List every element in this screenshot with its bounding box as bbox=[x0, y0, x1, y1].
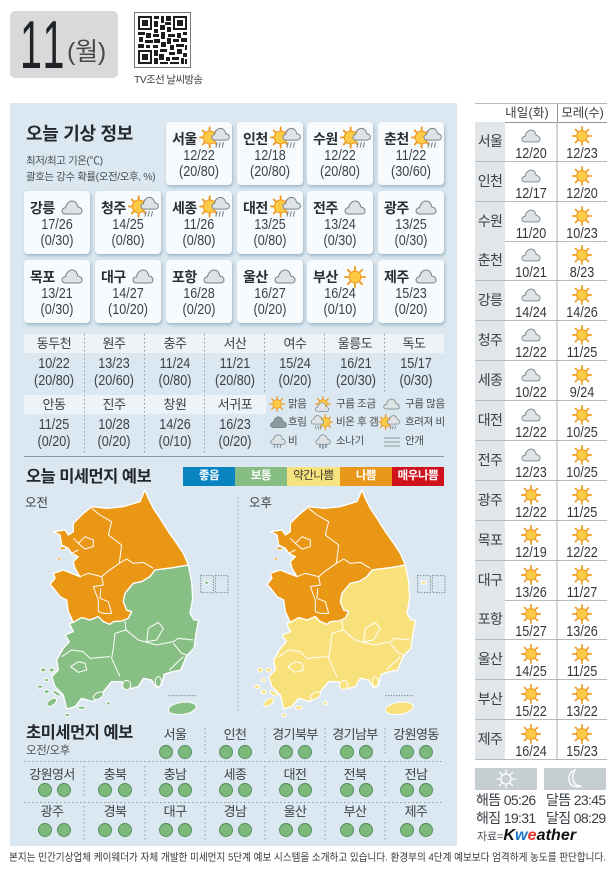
forecast row: 대구: 대구 bbox=[478, 572, 502, 588]
forecast row: 울산: 울산 bbox=[478, 651, 502, 667]
ultrafine dust grid: 경북 bbox=[104, 804, 126, 819]
card: 세종: (0/80) bbox=[183, 233, 215, 249]
card: 대구 bbox=[95, 260, 161, 323]
forecast row: 청주: 11/25 bbox=[567, 344, 597, 361]
card: 광주: (0/30) bbox=[395, 233, 427, 249]
forecast row: 전주: 전주 bbox=[478, 452, 502, 468]
table: other cities: (0/30) bbox=[400, 373, 432, 389]
card: 수원: 12/22 bbox=[324, 148, 356, 164]
card: 인천: 인천 bbox=[243, 131, 268, 147]
forecast row: 인천: 12/17 bbox=[515, 185, 547, 202]
table: other cities: 서귀포 bbox=[218, 397, 252, 412]
ultrafine dust grid: 전남 bbox=[405, 767, 427, 782]
card: 울산: 16/27 bbox=[254, 286, 286, 302]
dust level legend bbox=[183, 467, 444, 486]
forecast row: 제주: 제주 bbox=[478, 731, 502, 747]
table: other cities: (20/30) bbox=[336, 373, 376, 389]
forecast row: 포항: 13/26 bbox=[566, 623, 598, 640]
weather legend bbox=[269, 396, 445, 449]
label: morning: 오전 bbox=[25, 496, 48, 510]
dust level legend: 매우나쁨 bbox=[398, 470, 438, 482]
table: other cities: 16/23 bbox=[219, 417, 251, 433]
card: 목포: 목포 bbox=[30, 269, 55, 285]
ultrafine dust grid bbox=[24, 727, 442, 840]
table: other cities bbox=[24, 334, 444, 450]
forecast row: 목포 bbox=[475, 521, 607, 561]
moonrise and moonset times bbox=[546, 792, 606, 826]
forecast row: 울산: 11/25 bbox=[567, 663, 597, 680]
card: 세종 bbox=[166, 191, 232, 254]
table: other cities: 서산 bbox=[223, 336, 247, 351]
forecast row: 서울: 12/20 bbox=[515, 145, 547, 162]
sunrise and sunset times bbox=[476, 792, 536, 826]
forecast row: 춘천: 춘천 bbox=[478, 252, 502, 268]
dust level legend: 보통 bbox=[251, 470, 271, 482]
note text: 괄호는 강수 확률(오전/오후, %) bbox=[26, 171, 155, 183]
table: other cities: (20/60) bbox=[94, 373, 134, 389]
table: other cities: (0/20) bbox=[279, 373, 311, 389]
forecast row: 울산: 14/25 bbox=[515, 663, 547, 680]
forecast row: 강릉 bbox=[475, 281, 607, 321]
card: 대전 bbox=[237, 191, 303, 254]
forecast row: 부산: 부산 bbox=[478, 691, 502, 707]
card: 전주: 전주 bbox=[313, 200, 338, 216]
table: other cities: (0/20) bbox=[219, 434, 251, 450]
forecast table header: 모레(수) bbox=[561, 106, 604, 120]
heading: ultrafine dust: 초미세먼지 예보 bbox=[26, 724, 133, 742]
card: 목포: 13/21 bbox=[41, 286, 73, 302]
forecast row: 포항: 15/27 bbox=[515, 623, 547, 640]
table: other cities: 15/17 bbox=[400, 356, 432, 372]
forecast row: 대구: 13/26 bbox=[515, 584, 547, 601]
ultrafine dust grid: 전북 bbox=[344, 767, 366, 782]
weather legend: 맑음 bbox=[288, 398, 307, 410]
card: 전주: (0/30) bbox=[324, 233, 356, 249]
heading: fine dust: 오늘 미세먼지 예보 bbox=[26, 468, 151, 486]
table: other cities: 16/21 bbox=[340, 356, 372, 372]
card: 울산 bbox=[237, 260, 303, 323]
card: 부산: (0/10) bbox=[324, 302, 356, 318]
weather legend: 구름 많음 bbox=[405, 398, 445, 410]
table: other cities: 10/28 bbox=[98, 417, 130, 433]
forecast row: 대전: 10/25 bbox=[566, 424, 598, 441]
ultrafine dust grid: 충남 bbox=[164, 767, 186, 782]
ultrafine dust grid: 경기북부 bbox=[272, 727, 318, 742]
table: other cities: 진주 bbox=[102, 397, 126, 412]
note: morning afternoon: 오전/오후 bbox=[26, 745, 70, 757]
forecast row: 세종: 10/22 bbox=[515, 384, 547, 401]
forecast row: 청주: 청주 bbox=[478, 332, 502, 348]
forecast row: 목포: 목포 bbox=[478, 532, 502, 548]
table: other cities: 독도 bbox=[402, 336, 426, 351]
forecast row: 제주: 16/24 bbox=[515, 743, 547, 760]
card: 춘천 bbox=[378, 122, 444, 185]
ultrafine dust grid: 대전 bbox=[284, 767, 306, 782]
ultrafine dust grid: 강원영동 bbox=[393, 727, 439, 742]
forecast row: 수원 bbox=[475, 202, 607, 242]
forecast row: 전주 bbox=[475, 441, 607, 481]
date number: 11 bbox=[20, 7, 68, 83]
ultrafine dust grid: 제주 bbox=[405, 804, 427, 819]
icon: moon box bbox=[544, 768, 606, 790]
forecast row: 춘천: 8/23 bbox=[570, 264, 594, 281]
sunrise and sunset times: 해뜸 05:26 bbox=[476, 792, 535, 808]
card: 목포 bbox=[24, 260, 90, 323]
map: afternoon bbox=[254, 489, 446, 717]
label: afternoon: 오후 bbox=[249, 496, 272, 510]
forecast row: 대구 bbox=[475, 561, 607, 601]
forecast row: 대구: 11/27 bbox=[567, 584, 597, 601]
table: other cities: 11/25 bbox=[39, 417, 69, 433]
forecast row: 부산: 13/22 bbox=[566, 703, 598, 720]
card: 강릉 bbox=[24, 191, 90, 254]
forecast table header bbox=[475, 103, 607, 123]
forecast row: 인천: 인천 bbox=[478, 173, 502, 189]
table: other cities: (0/10) bbox=[159, 434, 191, 450]
table: other cities: 11/21 bbox=[220, 356, 250, 372]
source: 자료=Kweather bbox=[477, 827, 576, 844]
forecast row: 부산 bbox=[475, 680, 607, 720]
dust level legend: 좋음 bbox=[199, 470, 219, 482]
card: 서울: (20/80) bbox=[179, 164, 219, 180]
card: 부산: 부산 bbox=[313, 269, 338, 285]
QR code bbox=[134, 12, 191, 68]
card: 울산: (0/20) bbox=[254, 302, 286, 318]
forecast row: 전주: 10/25 bbox=[566, 464, 598, 481]
ultrafine dust grid: 부산 bbox=[344, 804, 366, 819]
date box bbox=[10, 11, 118, 78]
ultrafine dust grid: 세종 bbox=[224, 767, 246, 782]
table: other cities: 10/22 bbox=[38, 356, 70, 372]
forecast row: 춘천: 10/21 bbox=[515, 264, 547, 281]
forecast row: 대전: 12/22 bbox=[515, 424, 547, 441]
forecast row: 서울: 서울 bbox=[478, 133, 502, 149]
note text bbox=[26, 155, 155, 183]
card: 대전: 13/25 bbox=[254, 217, 286, 233]
card: 대구: 14/27 bbox=[112, 286, 144, 302]
table: other cities: (20/80) bbox=[34, 373, 74, 389]
forecast row: 춘천 bbox=[475, 241, 607, 281]
card: 대전: 대전 bbox=[243, 200, 268, 216]
card: 강릉: 강릉 bbox=[30, 200, 55, 216]
card: 광주: 광주 bbox=[384, 200, 409, 216]
forecast row: 포항 bbox=[475, 600, 607, 640]
card: 수원: 수원 bbox=[313, 131, 338, 147]
forecast row: 광주 bbox=[475, 481, 607, 521]
weather legend: 비 bbox=[288, 435, 297, 447]
table: other cities: 동두천 bbox=[37, 336, 71, 351]
card: 청주: 청주 bbox=[101, 200, 126, 216]
ultrafine dust grid: 광주 bbox=[41, 804, 63, 819]
weekday: (월) bbox=[67, 38, 106, 66]
ultrafine dust grid: 충북 bbox=[104, 767, 126, 782]
card: 대구: (10/20) bbox=[108, 302, 148, 318]
forecast row: 수원: 수원 bbox=[478, 213, 502, 229]
forecast row: 제주: 15/23 bbox=[566, 743, 598, 760]
icon: sunrise box bbox=[475, 768, 537, 790]
ultrafine dust grid: 경남 bbox=[224, 804, 246, 819]
card: 대구: 대구 bbox=[101, 269, 126, 285]
forecast row: 강릉: 14/26 bbox=[566, 304, 598, 321]
forecast row: 서울 bbox=[475, 122, 607, 162]
forecast row: 청주 bbox=[475, 321, 607, 361]
card: 대전: (0/80) bbox=[254, 233, 286, 249]
card: 목포: (0/30) bbox=[41, 302, 73, 318]
forecast row: 포항: 포항 bbox=[478, 611, 502, 627]
table: other cities: 여수 bbox=[283, 336, 307, 351]
card: 세종: 11/26 bbox=[184, 217, 214, 233]
dust level legend: 약간나쁨 bbox=[293, 470, 334, 482]
card: 전주 bbox=[307, 191, 373, 254]
card: 울산: 울산 bbox=[243, 269, 268, 285]
forecast row: 목포: 12/19 bbox=[515, 544, 547, 561]
card: 제주: 15/23 bbox=[395, 286, 427, 302]
forecast row: 광주: 11/25 bbox=[567, 504, 597, 521]
card: 부산: 16/24 bbox=[324, 286, 356, 302]
card: 청주: (0/80) bbox=[112, 233, 144, 249]
card: 포항: (0/20) bbox=[183, 302, 215, 318]
forecast row: 제주 bbox=[475, 720, 607, 760]
forecast row: 청주: 12/22 bbox=[515, 344, 547, 361]
card: 청주: 14/25 bbox=[112, 217, 144, 233]
forecast row: 광주: 광주 bbox=[478, 492, 502, 508]
dust level legend: 나쁨 bbox=[356, 470, 376, 482]
forecast row: 인천 bbox=[475, 162, 607, 202]
card: 서울 bbox=[166, 122, 232, 185]
card: 서울: 12/22 bbox=[183, 148, 215, 164]
forecast row: 강릉: 14/24 bbox=[515, 304, 547, 321]
weather legend: 흐림 bbox=[288, 416, 307, 428]
forecast row: 전주: 12/23 bbox=[515, 464, 547, 481]
table: other cities: 13/23 bbox=[98, 356, 130, 372]
forecast row: 강릉: 강릉 bbox=[478, 292, 502, 308]
moonrise and moonset times: 달짐 08:29 bbox=[546, 810, 605, 826]
ultrafine dust grid: 울산 bbox=[284, 804, 306, 819]
card: 부산 bbox=[307, 260, 373, 323]
table: other cities: 11/24 bbox=[160, 356, 190, 372]
weather legend: 구름 조금 bbox=[336, 398, 376, 410]
forecast row: 광주: 12/22 bbox=[515, 504, 547, 521]
forecast row: 세종: 세종 bbox=[478, 372, 502, 388]
main panel bbox=[10, 103, 457, 846]
table: other cities: 창원 bbox=[163, 397, 187, 412]
forecast row: 목포: 12/22 bbox=[566, 544, 598, 561]
card: 광주: 13/25 bbox=[395, 217, 427, 233]
ultrafine dust grid: 서울 bbox=[164, 727, 186, 742]
card: 제주: 제주 bbox=[384, 269, 409, 285]
forecast row: 부산: 15/22 bbox=[515, 703, 547, 720]
table: other cities: (0/80) bbox=[159, 373, 191, 389]
weather legend: 안개 bbox=[405, 435, 424, 447]
forecast table header: 내일(화) bbox=[505, 106, 549, 120]
card: 인천 bbox=[237, 122, 303, 185]
card: 인천: (20/80) bbox=[250, 164, 290, 180]
ultrafine dust grid: 경기남부 bbox=[332, 727, 378, 742]
moonrise and moonset times: 달뜸 23:45 bbox=[546, 792, 605, 808]
card: 춘천: 11/22 bbox=[396, 148, 426, 164]
forecast row: 대전: 대전 bbox=[478, 412, 502, 428]
card: 춘천: (30/60) bbox=[391, 164, 431, 180]
card: 춘천: 춘천 bbox=[384, 131, 409, 147]
card: 전주: 13/24 bbox=[324, 217, 356, 233]
table: other cities: (20/80) bbox=[215, 373, 255, 389]
forecast row: 수원: 10/23 bbox=[566, 225, 598, 242]
table: other cities: (0/20) bbox=[98, 434, 130, 450]
card: 강릉: 17/26 bbox=[41, 217, 73, 233]
forecast row: 수원: 11/20 bbox=[516, 225, 546, 242]
ultrafine dust grid: 강원영서 bbox=[29, 767, 75, 782]
forecast row: 인천: 12/20 bbox=[566, 185, 598, 202]
ultrafine dust grid: 인천 bbox=[224, 727, 246, 742]
QR caption: TV조선 날씨방송 bbox=[134, 74, 202, 86]
card: 세종: 세종 bbox=[172, 200, 197, 216]
card: 광주 bbox=[378, 191, 444, 254]
table: other cities: (0/20) bbox=[38, 434, 70, 450]
forecast row: 서울: 12/23 bbox=[566, 145, 598, 162]
table: other cities: 울릉도 bbox=[338, 336, 372, 351]
forecast row: 세종: 9/24 bbox=[570, 384, 594, 401]
map: morning bbox=[36, 489, 228, 717]
card: 청주 bbox=[95, 191, 161, 254]
card: 포항: 16/28 bbox=[183, 286, 215, 302]
forecast row: 대전 bbox=[475, 401, 607, 441]
card: 포항: 포항 bbox=[172, 269, 197, 285]
heading: today weather: 오늘 기상 정보 bbox=[26, 124, 133, 144]
table: other cities: 충주 bbox=[163, 336, 187, 351]
card: 수원 bbox=[307, 122, 373, 185]
card: 포항 bbox=[166, 260, 232, 323]
note text: 최저/최고 기온(℃) bbox=[26, 155, 103, 167]
table: other cities: 15/24 bbox=[279, 356, 311, 372]
table: other cities: 원주 bbox=[102, 336, 126, 351]
sunrise and sunset times: 해짐 19:31 bbox=[476, 810, 535, 826]
card: 제주: (0/20) bbox=[395, 302, 427, 318]
card: 강릉: (0/30) bbox=[41, 233, 73, 249]
weather legend: 흐려져 비 bbox=[405, 416, 445, 428]
card: 인천: 12/18 bbox=[254, 148, 286, 164]
weather legend: 소나기 bbox=[336, 435, 364, 447]
ultrafine dust grid: 대구 bbox=[164, 804, 186, 819]
card: 수원: (20/80) bbox=[320, 164, 360, 180]
card: 제주 bbox=[378, 260, 444, 323]
forecast row: 세종 bbox=[475, 361, 607, 401]
weather legend: 비온 후 갬 bbox=[336, 416, 378, 428]
card: 서울: 서울 bbox=[172, 131, 197, 147]
table: other cities: 안동 bbox=[42, 397, 66, 412]
table: other cities: 14/26 bbox=[159, 417, 191, 433]
forecast row: 울산 bbox=[475, 640, 607, 680]
